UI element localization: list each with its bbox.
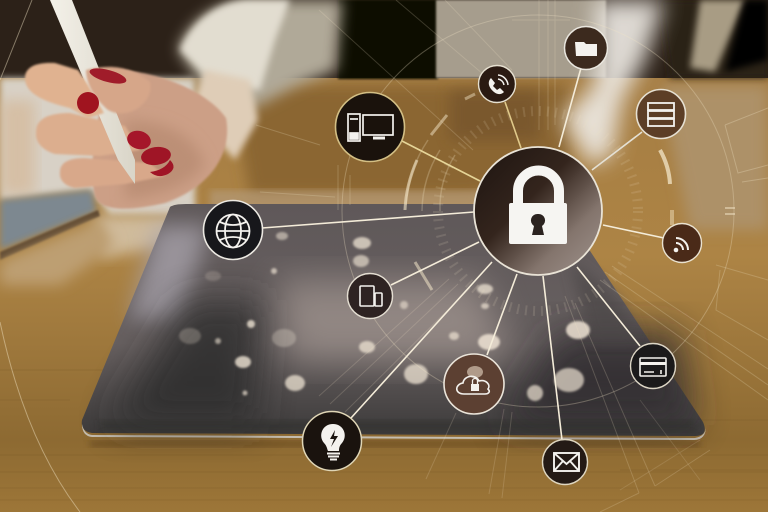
icon node: globe <box>204 200 262 260</box>
background: blurred room and sleeves <box>0 0 768 285</box>
icon node: light bulb <box>302 412 362 470</box>
hand holding stylus <box>25 0 227 209</box>
red nails <box>88 65 128 87</box>
icon node: mail <box>542 440 588 484</box>
icon node: credit card <box>630 344 676 388</box>
thumb <box>86 67 151 113</box>
icon node: cloud lock <box>444 354 504 414</box>
icon node: devices <box>348 274 392 318</box>
stylus <box>50 0 135 184</box>
icon node: computer <box>336 92 404 162</box>
tablet <box>82 204 706 440</box>
glowing network nodes on tablet <box>179 232 590 401</box>
icon node: phone call <box>478 66 516 102</box>
icon node: wifi signal <box>662 224 702 262</box>
palm and forearm <box>92 70 227 209</box>
ring finger <box>60 158 165 188</box>
index finger <box>25 63 104 118</box>
icon: padlock <box>509 170 567 244</box>
icon node: folder <box>564 26 608 70</box>
icon node: database <box>636 90 686 138</box>
central lock circle <box>474 147 602 275</box>
middle finger <box>36 113 140 156</box>
connector lines <box>262 68 664 440</box>
